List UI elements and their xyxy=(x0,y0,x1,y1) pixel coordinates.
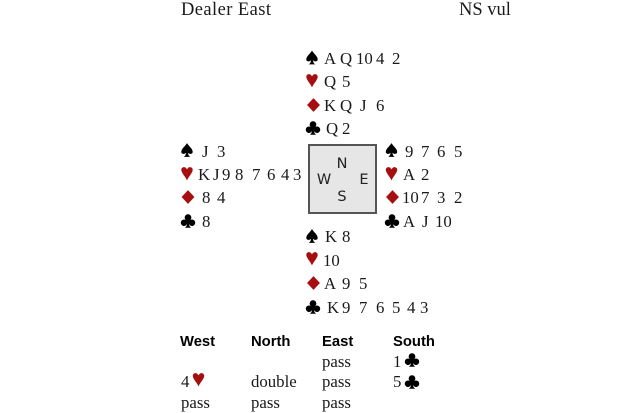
south diamonds: 9 xyxy=(342,274,350,293)
bidding round 2 xyxy=(181,372,419,391)
panel: east hand xyxy=(385,142,462,231)
bidding round 2: pass xyxy=(322,372,351,391)
bidding headers: East xyxy=(322,334,353,350)
north diamonds: K xyxy=(324,96,336,115)
east spades xyxy=(386,142,462,161)
compass table: N xyxy=(337,156,347,172)
south clubs: K xyxy=(327,298,339,317)
panel: north hand xyxy=(306,49,400,138)
heading: dealer: Dealer East xyxy=(181,0,272,20)
east hearts xyxy=(386,165,429,184)
south diamonds: A xyxy=(324,274,336,293)
east clubs: J xyxy=(422,212,429,231)
panel: west hand xyxy=(181,142,301,231)
west hearts: 6 xyxy=(267,165,275,184)
west clubs: 8 xyxy=(202,212,210,231)
south hearts: 10 xyxy=(323,251,340,270)
bidding round 1 xyxy=(322,352,419,371)
bidding round 2: double xyxy=(251,372,297,391)
north spades: 10 xyxy=(356,49,373,68)
north hearts: Q xyxy=(324,72,336,91)
west spades: J xyxy=(202,142,209,161)
south clubs: 5 xyxy=(392,298,400,317)
bidding round 3: pass xyxy=(181,393,210,412)
east clubs: 10 xyxy=(435,212,452,231)
south clubs: 6 xyxy=(376,298,384,317)
north hearts: 5 xyxy=(342,72,350,91)
compass table: S xyxy=(337,189,347,205)
bidding round 3: pass xyxy=(322,393,351,412)
south clubs: 9 xyxy=(342,298,350,317)
west hearts: 3 xyxy=(293,165,301,184)
north diamonds: Q xyxy=(340,96,352,115)
east clubs: A xyxy=(403,212,415,231)
north diamonds xyxy=(307,96,384,115)
bidding round 1: pass xyxy=(322,352,351,371)
east clubs xyxy=(385,212,452,231)
north spades: A xyxy=(324,49,336,68)
east diamonds: 3 xyxy=(437,188,445,207)
bidding headers xyxy=(180,334,435,350)
west diamonds xyxy=(182,188,226,207)
panel: bidding table xyxy=(180,334,435,412)
west hearts: J xyxy=(213,165,220,184)
north spades: Q xyxy=(340,49,352,68)
north hearts xyxy=(306,72,350,91)
north spades: 4 xyxy=(376,49,385,68)
south clubs: 4 xyxy=(407,298,416,317)
north spades: 2 xyxy=(392,49,400,68)
south clubs: 3 xyxy=(420,298,428,317)
east spades: 5 xyxy=(454,142,462,161)
bidding round 2: 4 xyxy=(181,372,190,391)
heading: vulnerability: NS vul xyxy=(459,0,511,20)
east diamonds: 2 xyxy=(454,188,462,207)
west hearts: 4 xyxy=(281,165,290,184)
north clubs: 2 xyxy=(342,119,350,138)
south diamonds: 5 xyxy=(359,274,367,293)
east diamonds: 7 xyxy=(421,188,429,207)
east diamonds xyxy=(386,188,462,207)
panel: south hand xyxy=(306,227,428,317)
east hearts: 2 xyxy=(421,165,429,184)
west diamonds: 8 xyxy=(202,188,210,207)
west hearts xyxy=(181,165,301,184)
east spades: 6 xyxy=(437,142,445,161)
west hearts: 8 xyxy=(235,165,243,184)
bidding headers: North xyxy=(251,334,290,350)
south spades xyxy=(306,227,350,246)
east diamonds: 10 xyxy=(402,188,419,207)
north clubs xyxy=(306,119,350,138)
north spades xyxy=(306,49,400,68)
bidding round 3: pass xyxy=(251,393,280,412)
south clubs: 7 xyxy=(359,298,367,317)
west hearts: 9 xyxy=(222,165,230,184)
bidding headers: West xyxy=(180,334,215,350)
north diamonds: J xyxy=(360,96,367,115)
east spades: 9 xyxy=(405,142,413,161)
west hearts: 7 xyxy=(252,165,260,184)
compass table: W xyxy=(317,172,331,188)
north clubs: Q xyxy=(326,119,338,138)
west spades xyxy=(181,142,225,161)
north diamonds: 6 xyxy=(376,96,384,115)
south spades: 8 xyxy=(342,227,350,246)
bidding round 3 xyxy=(181,393,351,412)
compass table xyxy=(309,145,376,213)
south diamonds xyxy=(307,274,367,293)
west spades: 3 xyxy=(217,142,225,161)
bidding round 2: 5 xyxy=(393,372,401,391)
south spades: K xyxy=(325,227,337,246)
east hearts: A xyxy=(403,165,415,184)
east spades: 7 xyxy=(421,142,429,161)
south clubs xyxy=(306,298,428,317)
bidding headers: South xyxy=(393,334,435,350)
compass table: E xyxy=(359,172,369,188)
west hearts: K xyxy=(198,165,210,184)
bidding round 1: 1 xyxy=(393,352,401,371)
west diamonds: 4 xyxy=(217,188,226,207)
